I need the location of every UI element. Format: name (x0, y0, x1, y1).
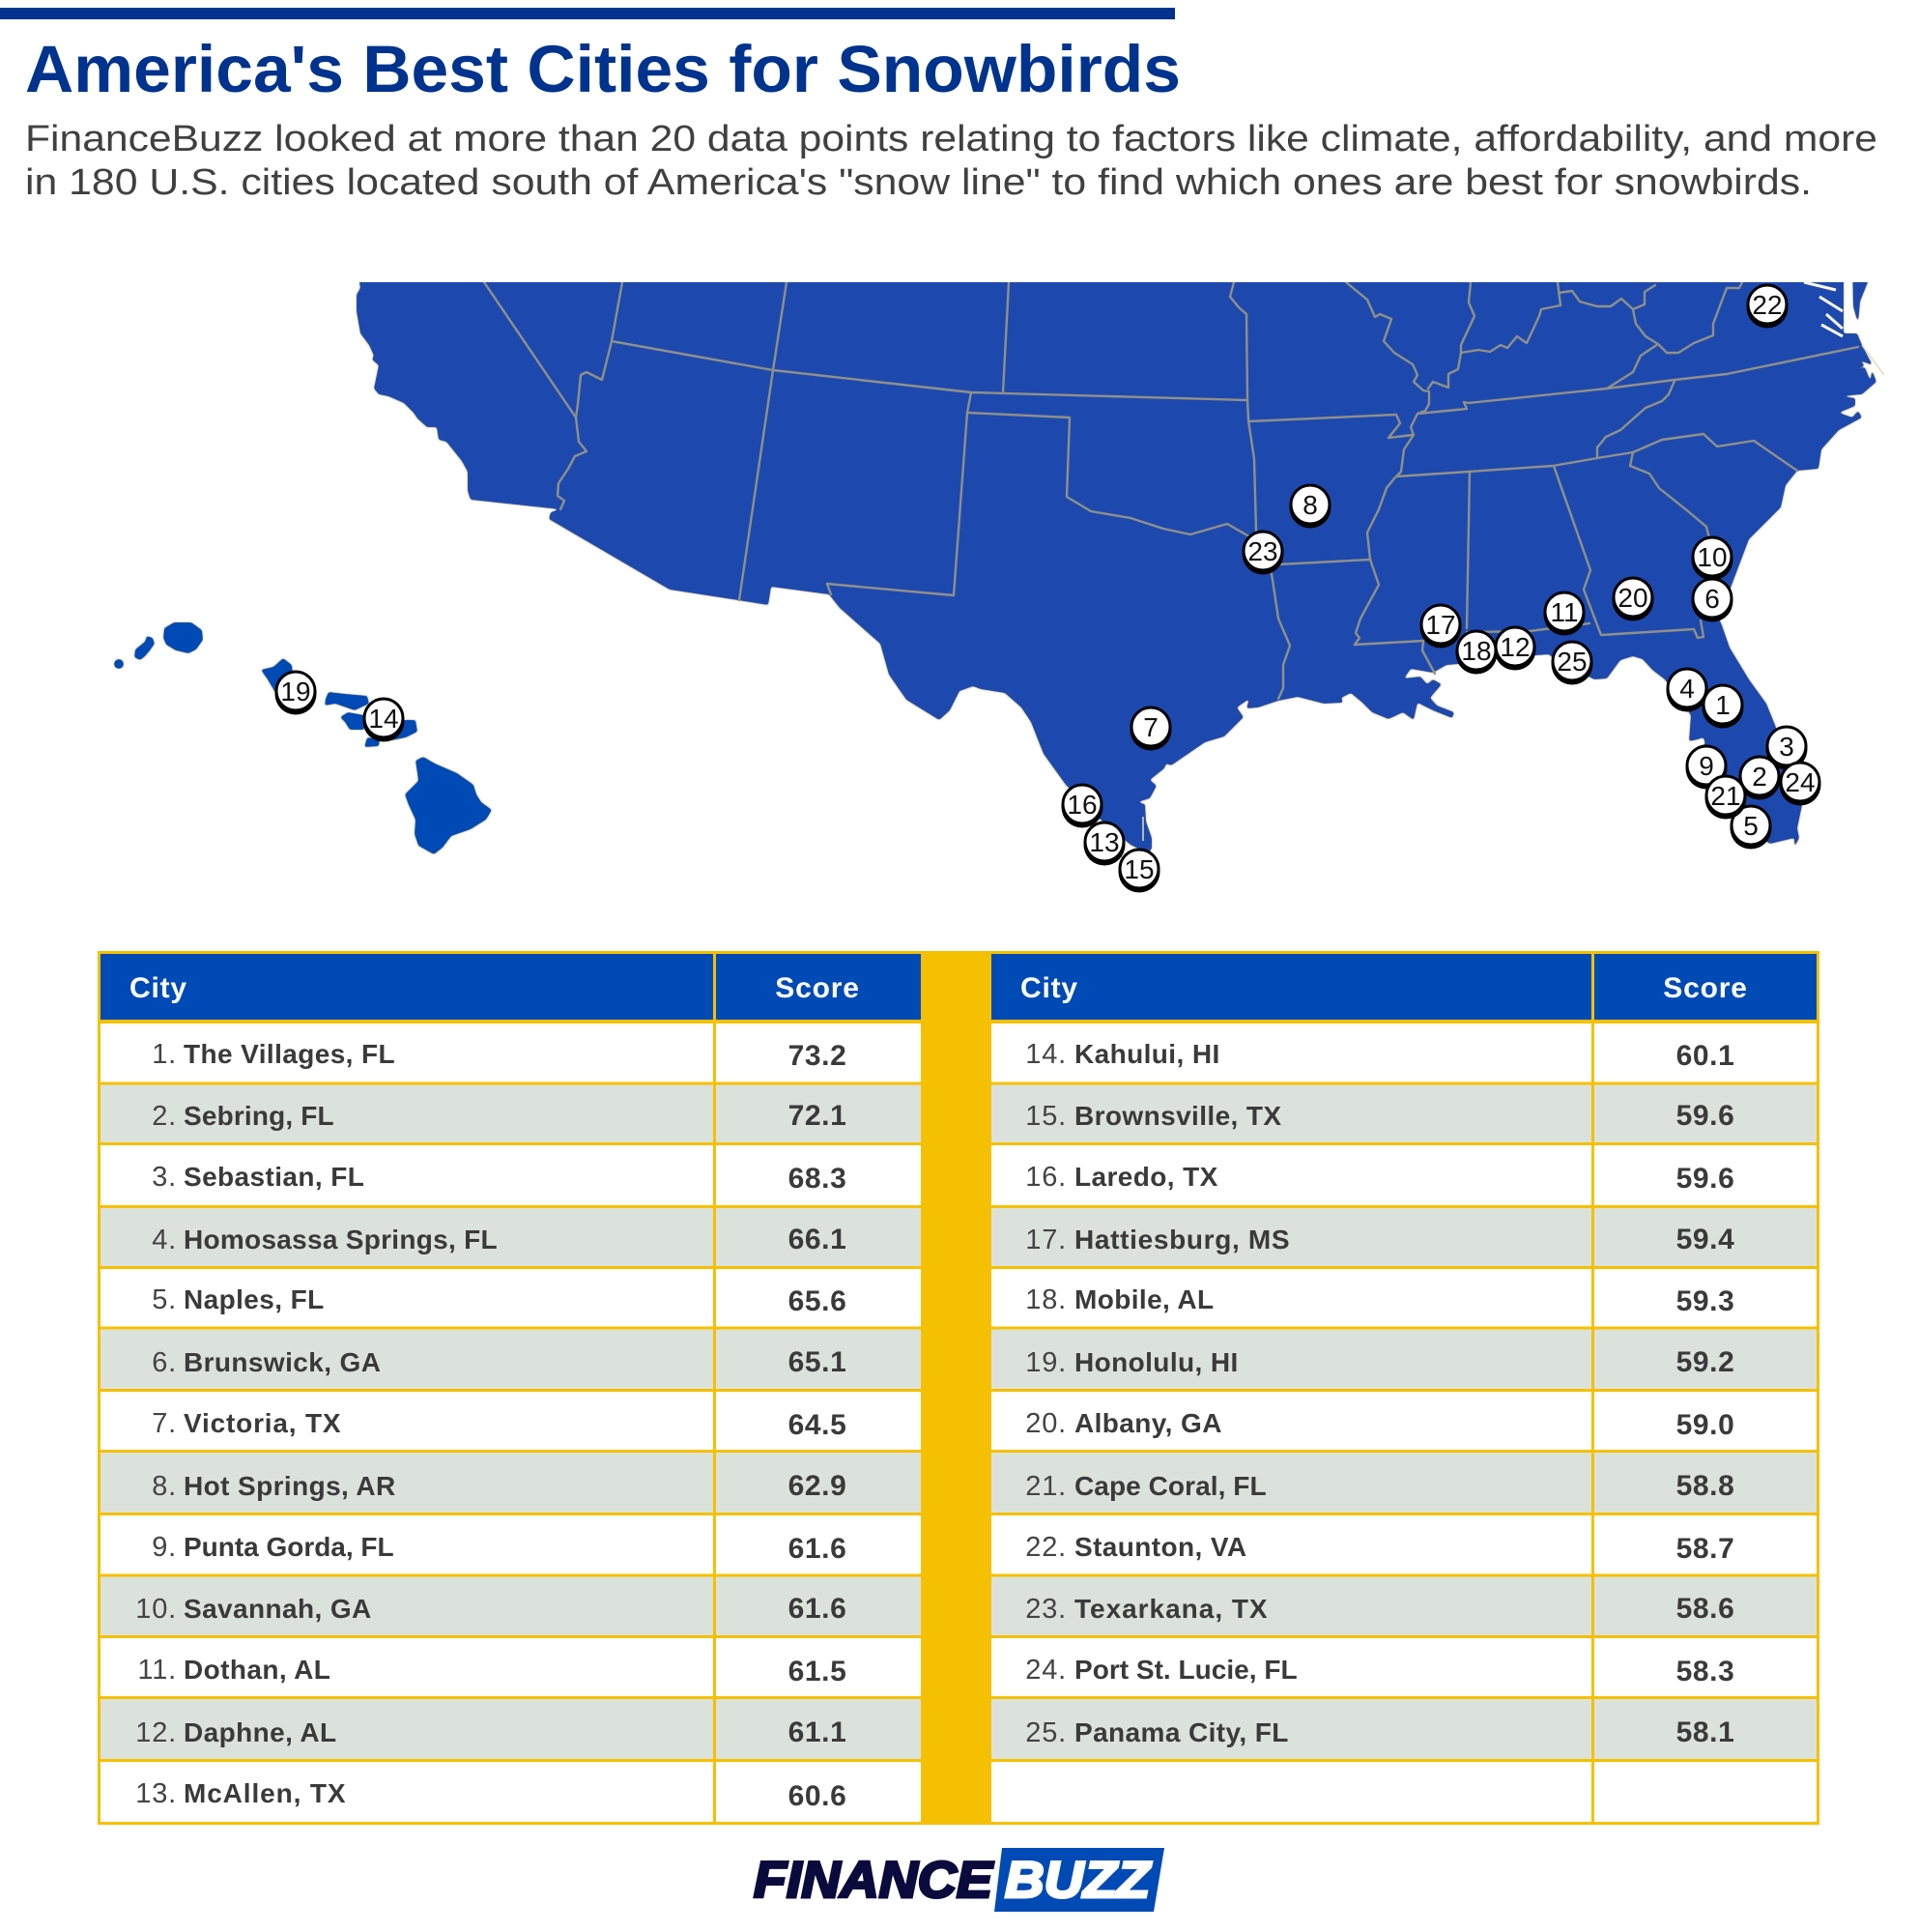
mainland silhouette (357, 261, 1876, 853)
left column rankings: Daphne, AL (184, 1717, 337, 1747)
left column rankings: 61.6 (788, 1533, 846, 1565)
left column rankings: 64.5 (788, 1409, 846, 1441)
marker 4 (1666, 669, 1708, 711)
left column rankings: 66.1 (788, 1224, 846, 1255)
marker 5: 5 (1743, 811, 1759, 841)
left column rankings: 13. (135, 1778, 177, 1809)
left column rankings: 60.6 (788, 1780, 846, 1812)
Hawaii (114, 622, 492, 854)
left column rankings: 9. (152, 1532, 177, 1563)
left column rankings: 61.6 (788, 1593, 846, 1625)
right column rankings: Laredo, TX (1074, 1162, 1218, 1192)
right column rankings: 21. (1025, 1471, 1067, 1502)
left column rankings: 10. (135, 1594, 177, 1625)
left column rankings: Sebring, FL (184, 1101, 334, 1131)
subtitle (25, 119, 1877, 203)
right column rankings: 59.2 (1676, 1346, 1734, 1378)
marker 12 (1494, 627, 1536, 671)
marker 3 (1766, 727, 1807, 769)
marker 6 (1691, 579, 1733, 622)
city markers (274, 285, 1820, 893)
right column rankings: 22. (1025, 1532, 1067, 1563)
right column rankings: 58.3 (1676, 1656, 1734, 1687)
table headers (129, 972, 1748, 1004)
marker 1 (1703, 685, 1743, 729)
left column rankings: 62.9 (788, 1470, 846, 1502)
marker 14 (363, 699, 404, 742)
marker 20: 20 (1617, 583, 1648, 613)
left column rankings: 7. (152, 1408, 177, 1439)
marker 23: 23 (1247, 536, 1278, 566)
left column rankings: 12. (135, 1717, 177, 1748)
marker 17: 17 (1425, 610, 1456, 640)
marker 10 (1691, 537, 1733, 580)
marker 2 (1739, 757, 1780, 800)
marker 7 (1131, 707, 1171, 750)
state borders (484, 282, 1858, 699)
marker 3: 3 (1779, 732, 1794, 762)
marker 13: 13 (1089, 827, 1120, 857)
marker 2: 2 (1752, 762, 1767, 792)
right column rankings: 14. (1025, 1039, 1067, 1070)
left column rankings: 61.5 (788, 1656, 846, 1687)
left column rankings: Brunswick, GA (184, 1347, 381, 1377)
right column rankings: 20. (1025, 1408, 1067, 1439)
FinanceBuzz logo (754, 1848, 1164, 1912)
marker 12: 12 (1500, 632, 1531, 662)
title: America's Best Cities for Snowbirds (25, 32, 1181, 106)
right column rankings: Texarkana, TX (1074, 1594, 1268, 1624)
right column rankings: Brownsville, TX (1074, 1101, 1281, 1131)
right column rankings: 58.1 (1676, 1716, 1734, 1748)
right column rankings: 58.6 (1676, 1593, 1734, 1625)
right column rankings: 59.4 (1676, 1224, 1734, 1255)
right column rankings: 15. (1025, 1101, 1067, 1132)
marker 13 (1084, 822, 1125, 866)
left column rankings: 73.2 (788, 1040, 846, 1072)
table headers: Score (1663, 972, 1748, 1004)
right column rankings: Cape Coral, FL (1074, 1471, 1267, 1501)
marker 8 (1289, 485, 1331, 528)
marker 10: 10 (1697, 542, 1728, 572)
marker 21: 21 (1710, 781, 1741, 811)
table headers: Score (775, 972, 860, 1004)
logo wordmark: Finance: FINANCE (754, 1852, 994, 1909)
marker 7: 7 (1143, 712, 1159, 742)
right column rankings: 59.0 (1676, 1409, 1734, 1441)
marker 25: 25 (1557, 647, 1588, 677)
left column rankings: Sebastian, FL (184, 1162, 364, 1192)
right column rankings: 59.6 (1676, 1163, 1734, 1195)
logo wordmark: Buzz: BUZZ (1005, 1852, 1153, 1909)
left column rankings: 65.1 (788, 1346, 846, 1378)
table headers: City (1020, 972, 1078, 1004)
marker 20 (1612, 578, 1654, 620)
left column rankings: 72.1 (788, 1100, 846, 1132)
marker 9: 9 (1699, 751, 1714, 781)
left column rankings (135, 1039, 846, 1812)
left column rankings: 65.6 (788, 1285, 846, 1317)
left column rankings: 6. (152, 1347, 177, 1378)
left column rankings: Savannah, GA (184, 1594, 372, 1624)
right column rankings: Staunton, VA (1074, 1532, 1246, 1562)
marker 14: 14 (368, 704, 399, 734)
right column rankings: 18. (1025, 1284, 1067, 1315)
right column rankings: 59.6 (1676, 1100, 1734, 1132)
marker 17 (1420, 605, 1461, 648)
left column rankings: The Villages, FL (184, 1039, 395, 1069)
gold separator column (921, 951, 991, 1825)
left column rankings: 1. (152, 1039, 177, 1070)
right column rankings: 58.7 (1676, 1533, 1734, 1565)
left column rankings: 11. (137, 1655, 177, 1686)
right column rankings: 19. (1025, 1347, 1067, 1378)
marker 18 (1455, 631, 1498, 675)
right column rankings: 60.1 (1676, 1040, 1734, 1072)
row backgrounds (99, 1083, 1818, 1760)
marker 8: 8 (1303, 490, 1318, 520)
marker 24 (1780, 763, 1820, 806)
left column rankings: 61.1 (788, 1716, 846, 1748)
marker 18: 18 (1461, 636, 1492, 666)
marker 16: 16 (1067, 790, 1098, 820)
right column rankings: 59.3 (1676, 1285, 1734, 1317)
right column rankings: Kahului, HI (1074, 1039, 1220, 1069)
top accent bar (0, 8, 1175, 19)
marker 4: 4 (1679, 674, 1695, 704)
rankings table (98, 951, 1819, 1825)
marker 15: 15 (1124, 854, 1155, 884)
subtitle: FinanceBuzz looked at more than 20 data points relating to factors like climate, affordability, and more (25, 119, 1877, 159)
left column rankings: McAllen, TX (184, 1778, 346, 1808)
marker 19 (274, 672, 317, 715)
marker 19: 19 (280, 677, 311, 706)
marker 24: 24 (1785, 767, 1816, 797)
marker 11: 11 (1550, 597, 1579, 627)
right column rankings: Port St. Lucie, FL (1074, 1655, 1298, 1685)
right column rankings: 58.8 (1676, 1470, 1734, 1502)
marker 22: 22 (1752, 290, 1783, 320)
right column rankings: 25. (1025, 1717, 1067, 1748)
marker 15 (1119, 850, 1159, 893)
left column rankings: Homosassa Springs, FL (184, 1225, 498, 1254)
left column rankings: Hot Springs, AR (184, 1471, 396, 1501)
left column rankings: 2. (152, 1101, 177, 1132)
right column rankings: 16. (1025, 1162, 1067, 1193)
right column rankings: Albany, GA (1074, 1408, 1222, 1438)
table headers: City (129, 972, 187, 1004)
right column rankings: Panama City, FL (1074, 1717, 1289, 1747)
right column rankings: Honolulu, HI (1074, 1347, 1239, 1377)
marker 22 (1747, 285, 1788, 329)
logo badge (994, 1848, 1164, 1912)
marker 25 (1552, 642, 1592, 684)
left column rankings: 4. (152, 1225, 177, 1255)
left column rankings: 5. (152, 1284, 177, 1315)
marker 16 (1061, 785, 1103, 827)
table grid lines (98, 951, 1819, 1825)
marker 5 (1730, 806, 1772, 849)
left column rankings: Dothan, AL (184, 1655, 330, 1685)
marker 21 (1704, 776, 1747, 820)
map: southern United States (114, 261, 1884, 893)
right column rankings: 24. (1025, 1655, 1067, 1686)
coastal inlets (1804, 282, 1843, 336)
table header bands (99, 952, 1818, 1022)
subtitle: in 180 U.S. cities located south of America's "snow line" to find which ones are best for snowbirds. (25, 162, 1812, 203)
marker 11 (1544, 592, 1585, 636)
marker 6: 6 (1704, 584, 1720, 614)
marker 1: 1 (1715, 690, 1731, 720)
right column rankings: 17. (1025, 1225, 1067, 1255)
left column rankings: Naples, FL (184, 1284, 325, 1314)
left column rankings: 8. (152, 1471, 177, 1502)
left column rankings: Victoria, TX (184, 1408, 341, 1438)
left column rankings: 68.3 (788, 1163, 846, 1195)
marker 23 (1243, 532, 1283, 574)
right column rankings (1025, 1039, 1734, 1748)
right column rankings: 23. (1025, 1594, 1067, 1625)
right column rankings: Mobile, AL (1074, 1284, 1215, 1314)
left column rankings: 3. (152, 1162, 177, 1193)
right column rankings: Hattiesburg, MS (1074, 1225, 1290, 1254)
marker 9 (1685, 746, 1728, 789)
left column rankings: Punta Gorda, FL (184, 1532, 394, 1562)
